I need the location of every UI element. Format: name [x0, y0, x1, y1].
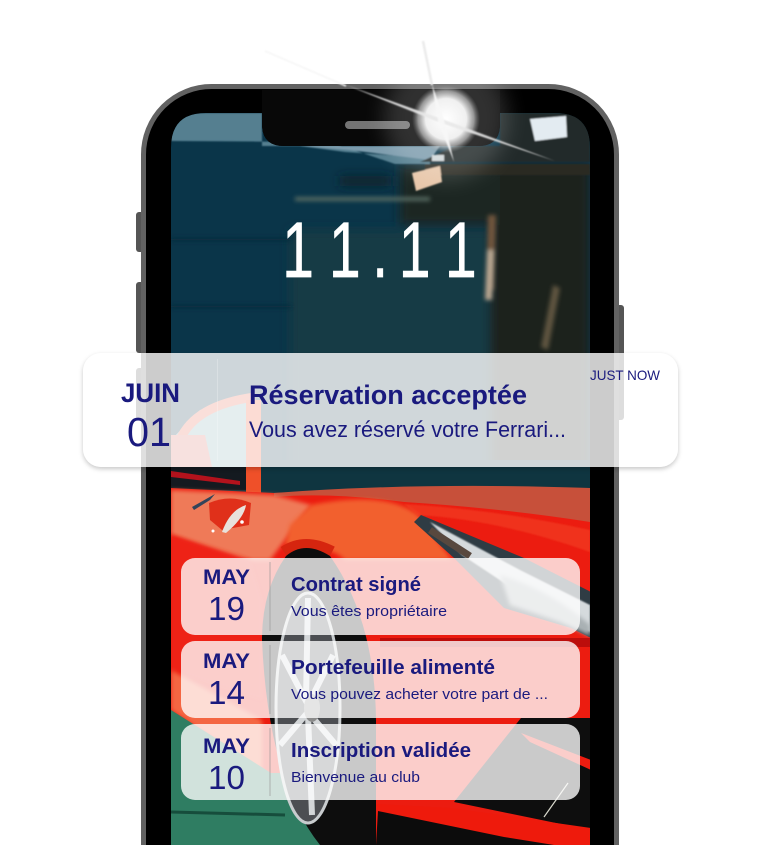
date	[121, 378, 180, 455]
card: Portefeuille alimenté: Vous pouvez acheter votre part de ...	[291, 686, 548, 703]
date: 01	[127, 409, 171, 455]
card: Contrat signé: 19	[208, 590, 245, 627]
phone mockup	[136, 41, 624, 845]
front splitter	[552, 822, 590, 830]
notification message: Vous avez réservé votre Ferrari...	[249, 417, 566, 442]
wallpaper photo	[171, 113, 591, 845]
speaker	[345, 121, 410, 129]
card: Contrat signé: MAY	[203, 566, 250, 589]
front bumper and intake	[376, 647, 590, 812]
notch	[262, 90, 500, 146]
window and windscreen	[214, 467, 590, 493]
notification title: Réservation acceptée	[249, 380, 527, 410]
car body	[171, 487, 590, 845]
headlight	[414, 515, 591, 638]
timestamp: JUST NOW	[590, 367, 661, 383]
card: Portefeuille alimenté	[181, 641, 580, 718]
card: Portefeuille alimenté: 14	[208, 674, 245, 711]
card: Contrat signé: Contrat signé	[291, 574, 421, 596]
card: Inscription validée: Inscription validée	[291, 740, 471, 762]
main notification: Réservation acceptée	[83, 353, 678, 467]
side buttons	[136, 212, 624, 420]
card: Contrat signé: Vous êtes propriétaire	[291, 603, 447, 620]
card: Contrat signé	[181, 558, 580, 635]
bonnet reflections	[274, 486, 590, 522]
date: JUIN	[121, 378, 180, 408]
ground	[171, 710, 335, 845]
card: Inscription validée	[181, 724, 580, 800]
lens flare	[265, 41, 555, 180]
clock: 11.11	[282, 206, 477, 294]
card: Portefeuille alimenté: MAY	[203, 650, 250, 673]
door handle	[192, 494, 251, 533]
wheel	[262, 545, 376, 845]
card: Inscription validée: MAY	[203, 735, 250, 758]
phone body	[144, 86, 616, 845]
card: Inscription validée: Bienvenue au club	[291, 769, 420, 786]
card: Inscription validée: 10	[208, 759, 245, 796]
card: Portefeuille alimenté: Portefeuille alimenté	[291, 657, 495, 679]
